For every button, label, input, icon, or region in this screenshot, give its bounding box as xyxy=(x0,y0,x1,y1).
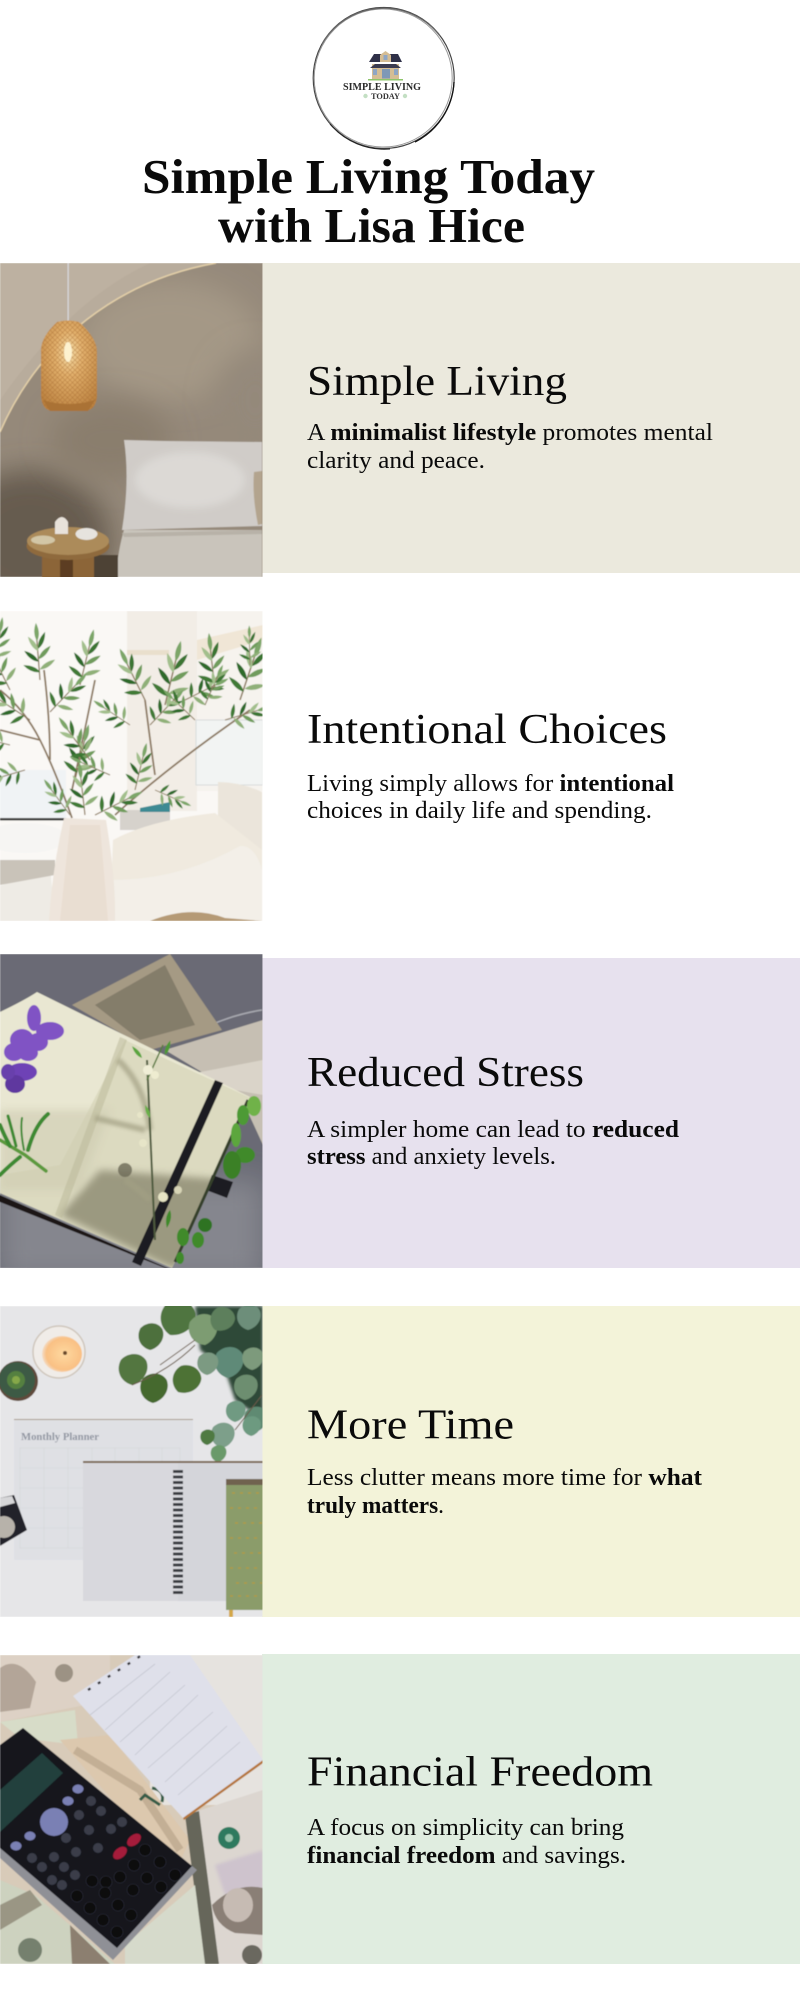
body text: truly matters. xyxy=(307,1492,444,1519)
pillow xyxy=(122,440,262,530)
panel: financial freedom xyxy=(0,1654,800,1965)
panel: more time xyxy=(0,1295,800,1617)
photo: journal with pressed flowers xyxy=(0,954,263,1280)
body text: A minimalist lifestyle promotes mental xyxy=(307,419,713,446)
heading: Reduced Stress xyxy=(307,1050,584,1096)
body text xyxy=(307,1814,626,1869)
purple flowers xyxy=(1,1005,64,1093)
logo sub-wordmark: TODAY xyxy=(371,91,400,101)
bedside table xyxy=(42,556,95,577)
eucalyptus xyxy=(119,1295,268,1462)
left green sprig xyxy=(0,1114,48,1175)
icon: house xyxy=(368,51,403,80)
photo: desk flat lay with planner: Monthly Planner xyxy=(21,1432,100,1443)
monthly planner xyxy=(14,1420,193,1560)
body text: A focus on simplicity can bring xyxy=(307,1814,624,1841)
right green foliage xyxy=(175,1096,261,1264)
photo: bedroom with pendant lamp xyxy=(0,263,262,577)
centre stem xyxy=(118,1040,182,1240)
heading: More Time xyxy=(307,1402,514,1448)
body text: A simpler home can lead to reduced xyxy=(307,1116,679,1143)
title: Simple Living Today xyxy=(142,149,596,204)
panel: reduced stress xyxy=(0,954,800,1280)
body text: clarity and peace. xyxy=(307,447,485,474)
photo: desk flat lay with planner xyxy=(0,1295,268,1617)
body text: choices in daily life and spending. xyxy=(307,797,652,824)
body text: Less clutter means more time for what xyxy=(307,1464,703,1491)
body text: Living simply allows for intentional xyxy=(307,770,674,797)
title xyxy=(142,149,596,253)
keys xyxy=(10,1784,84,1850)
body text xyxy=(307,419,713,474)
bedding xyxy=(116,530,262,577)
body text: financial freedom and savings. xyxy=(307,1842,626,1869)
body text xyxy=(307,770,674,824)
heading: Financial Freedom xyxy=(307,1750,653,1796)
elastic band xyxy=(132,1080,223,1266)
heading: Intentional Choices xyxy=(307,707,667,753)
photo: vase with olive branches xyxy=(0,611,278,921)
sofa xyxy=(218,782,262,850)
logo wordmark: SIMPLE LIVING xyxy=(343,81,421,93)
bills xyxy=(0,1655,110,1722)
logo ring xyxy=(313,8,454,149)
postcards xyxy=(72,954,222,1050)
body text xyxy=(307,1116,679,1170)
succulent xyxy=(0,1361,38,1401)
logo xyxy=(313,8,454,149)
panel: intentional choices xyxy=(0,611,674,921)
calculator xyxy=(0,1814,198,1960)
candle xyxy=(33,1326,85,1378)
body text xyxy=(307,1464,703,1519)
foliage xyxy=(0,616,278,830)
green book xyxy=(226,1485,263,1610)
heading: Simple Living xyxy=(307,359,567,405)
display xyxy=(0,1753,63,1832)
camera xyxy=(0,1495,27,1546)
pendant lamp xyxy=(41,320,97,411)
body text: stress and anxiety levels. xyxy=(307,1143,556,1170)
photo: calculator on banknotes xyxy=(0,1655,263,1965)
branches xyxy=(0,670,250,818)
vase xyxy=(49,818,115,921)
panel: simple living xyxy=(0,263,800,610)
open notebook xyxy=(83,1560,178,1601)
spiral binding xyxy=(173,1470,183,1596)
notepad xyxy=(73,1655,263,1818)
notebook xyxy=(0,1194,169,1268)
title: with Lisa Hice xyxy=(218,198,525,253)
